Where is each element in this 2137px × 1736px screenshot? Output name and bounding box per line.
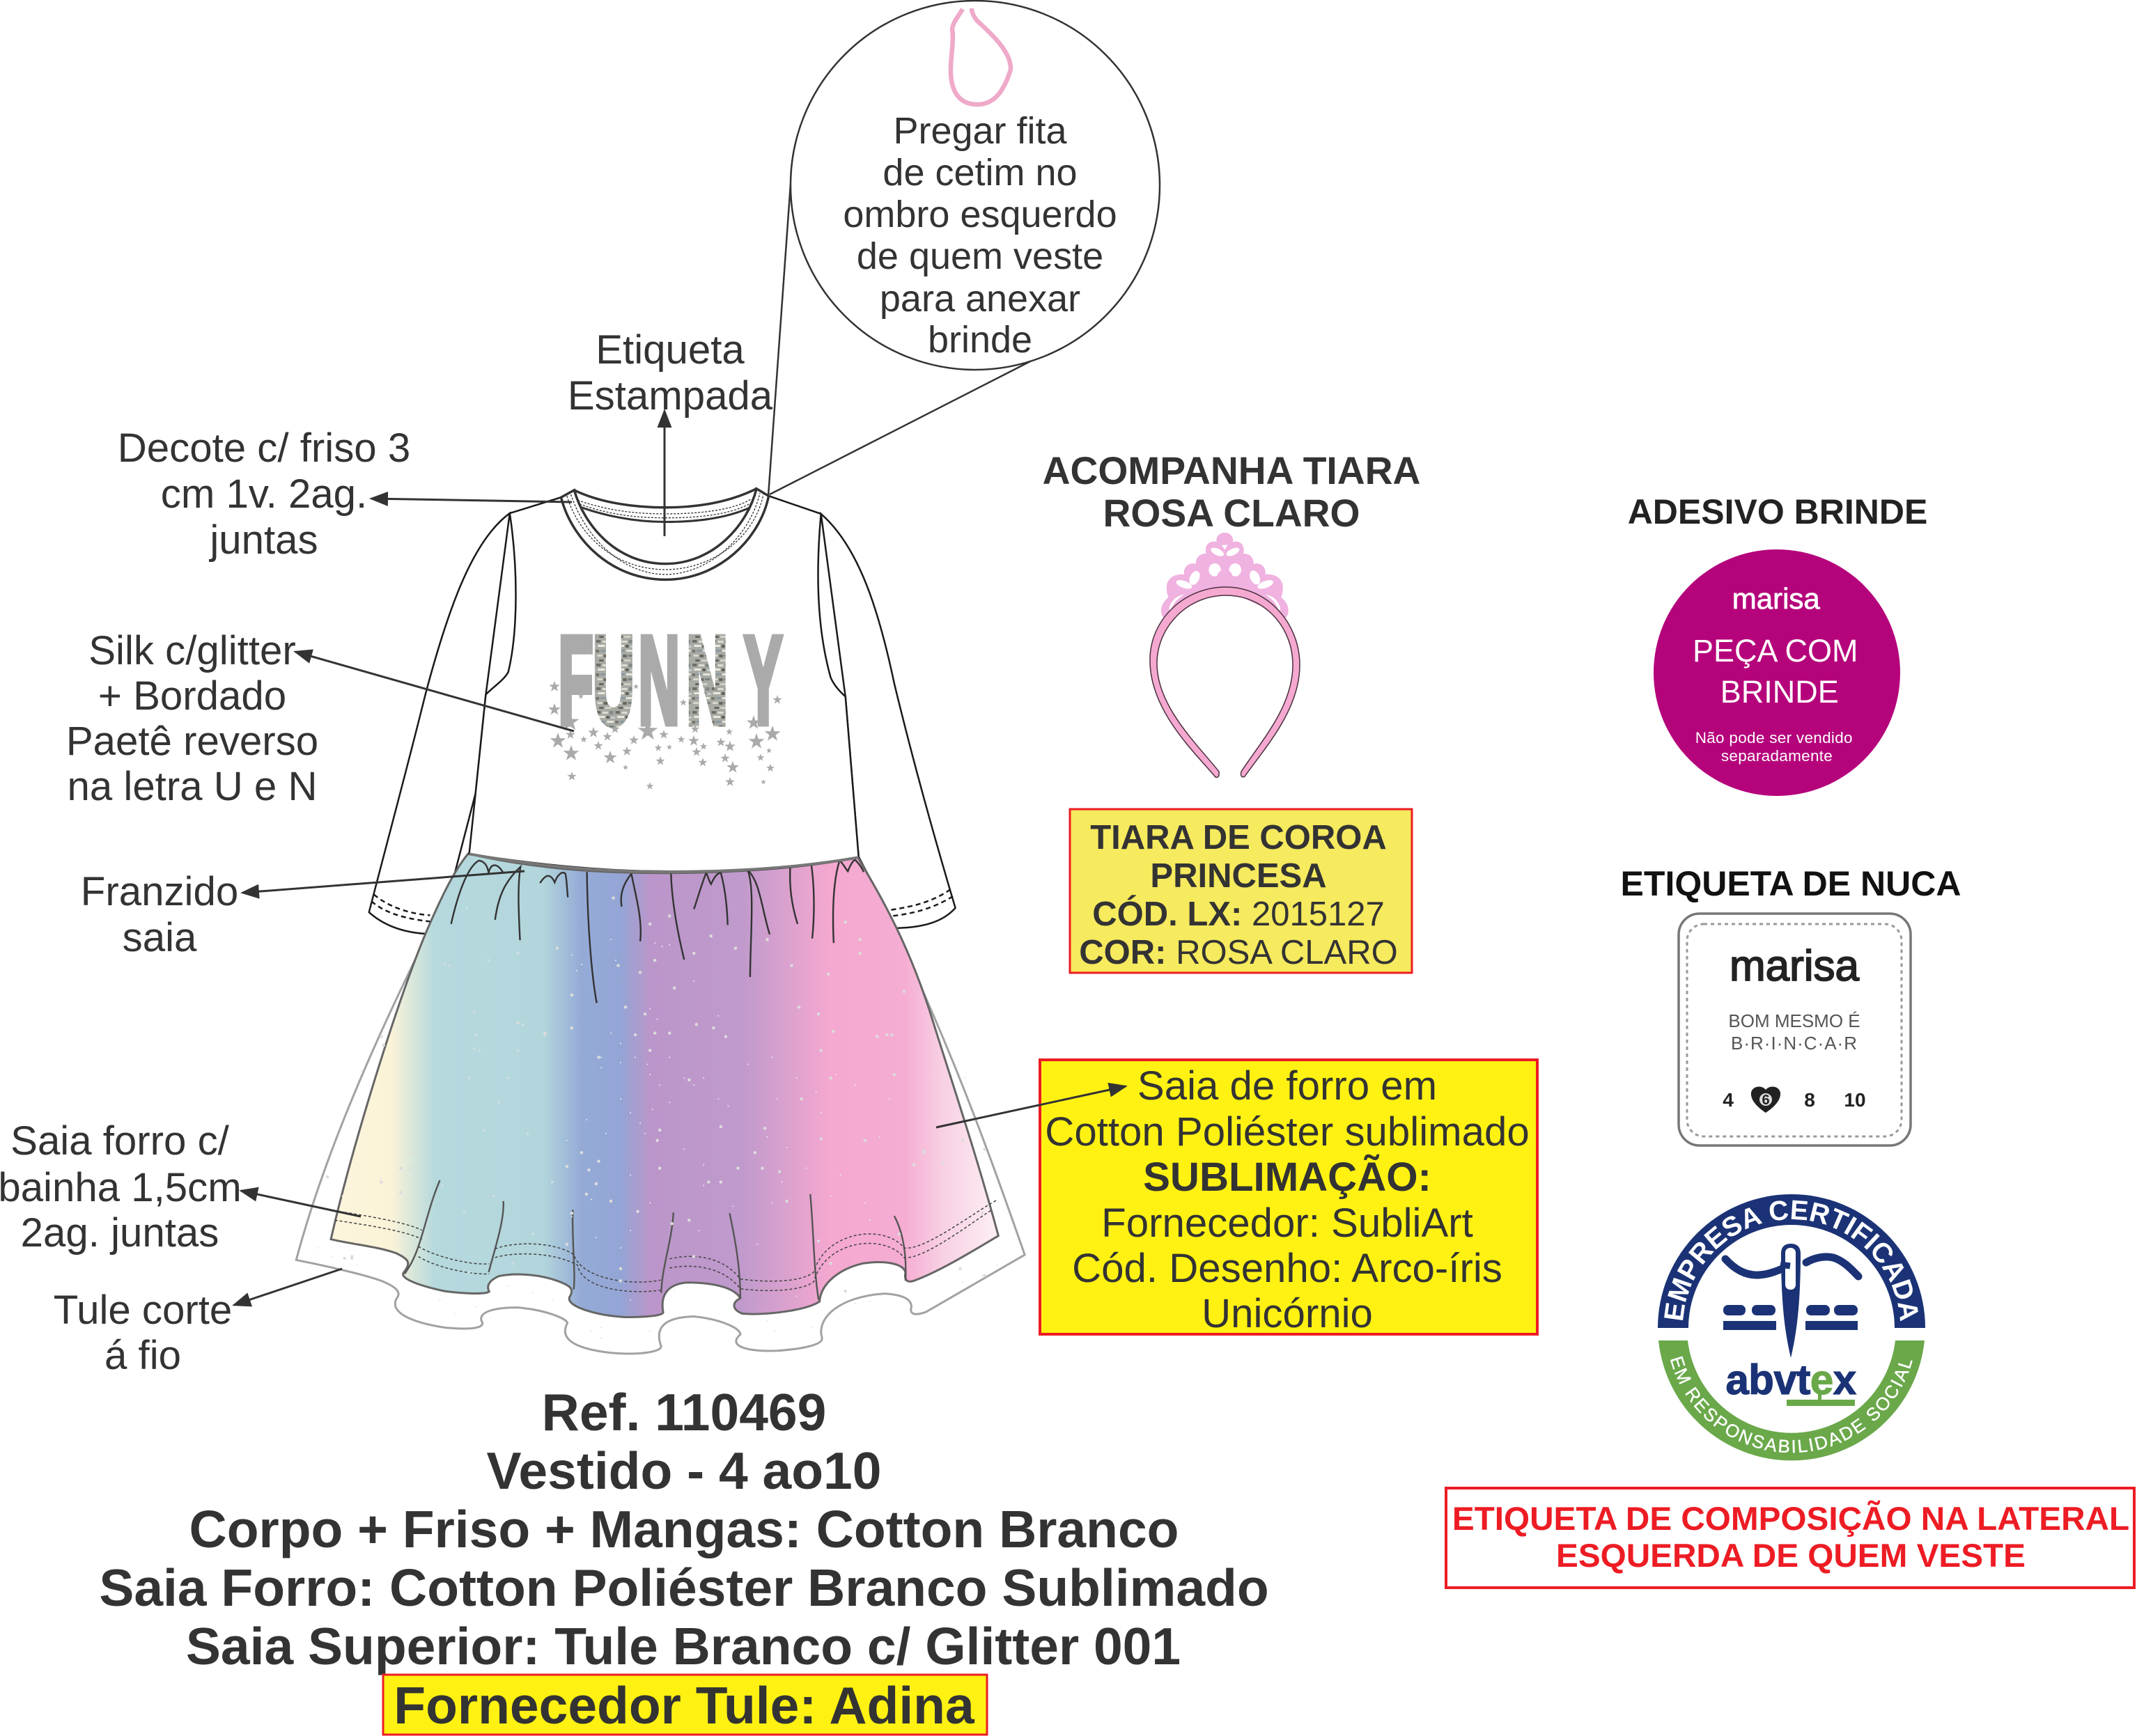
label: Etiqueta Estampada: Estampada [568, 373, 773, 419]
icon: needle and thread [1723, 1244, 1858, 1358]
product specification text: Vestido - 4 ao10 [487, 1441, 881, 1500]
callout: sublimação: Fornecedor: SubliArt [1101, 1201, 1473, 1246]
callout: tiara spec: PRINCESA [1150, 857, 1327, 895]
label: Decote: cm 1v. 2ag. [161, 471, 367, 517]
callout: sublimação: Unicórnio [1202, 1291, 1373, 1336]
product specification text: Saia Superior: Tule Branco c/ Glitter 001 [186, 1617, 1181, 1675]
FUNNY lettering: FUNNY [558, 610, 782, 751]
callout: etiqueta de composição [1446, 1488, 2134, 1588]
glitter on tulle [318, 898, 997, 1338]
label: Silk: Silk c/glitter [88, 628, 296, 673]
abvtex seal [1658, 1194, 1925, 1461]
sticker: peça com brinde [1654, 549, 1900, 796]
cuff stitching [371, 889, 953, 921]
callout: sublimação: Cotton Poliéster sublimado [1045, 1109, 1530, 1155]
arrow: saia forro [241, 1191, 361, 1217]
label: Saia forro: bainha 1,5cm [0, 1165, 242, 1210]
icon: size heart [1751, 1086, 1780, 1113]
label: Etiqueta Estampada: Etiqueta [596, 327, 745, 373]
label: Franzido saia: saia [123, 915, 197, 960]
abvtex wordmark: abvtex [1725, 1356, 1856, 1403]
heading: etiqueta de nuca: ETIQUETA DE NUCA [1621, 864, 1961, 903]
label: Tule: Tule corte [54, 1288, 232, 1333]
label: Saia forro: Saia forro c/ [10, 1118, 230, 1164]
bodice [469, 489, 859, 872]
ribbon note text: de quem veste [857, 235, 1103, 277]
heading: adesivo brinde: ADESIVO BRINDE [1628, 492, 1927, 531]
arrow: saia de forro [936, 1086, 1126, 1127]
callout: tiara spec: COR: ROSA CLARO [1079, 934, 1398, 971]
neck label: 10 [1844, 1089, 1866, 1111]
tulle overlay [296, 854, 1025, 1354]
label: Saia forro: 2ag. juntas [21, 1210, 219, 1256]
label: Silk: na letra U e N [68, 764, 317, 809]
label: Silk: Paetê reverso [66, 719, 318, 764]
product specification text: Corpo + Friso + Mangas: Cotton Branco [189, 1500, 1179, 1558]
garment: dress technical drawing [296, 489, 1025, 1354]
callout: tiara spec: CÓD. LX: 2015127 [1092, 896, 1385, 933]
neck label: marisa [1730, 942, 1860, 990]
arrow: silk [295, 652, 574, 731]
arrow: decote [371, 499, 572, 502]
abvtex seal: EMPRESA CERTIFICADA [1664, 1201, 1918, 1322]
arrow: tule [234, 1269, 342, 1305]
heading: tiara: ACOMPANHA TIARA [1043, 449, 1420, 492]
arrow: franzido [242, 871, 524, 893]
ribbon note text: de cetim no [883, 152, 1078, 194]
sticker: peça com brinde: marisa [1732, 582, 1820, 615]
callout: sublimação: Saia de forro em [1137, 1063, 1437, 1109]
callout: tiara spec: TIARA DE COROA [1090, 819, 1387, 857]
stars [548, 681, 782, 790]
ribbon note text: brinde [928, 319, 1032, 361]
product specification text: Ref. 110469 [542, 1383, 826, 1441]
label: Decote: Decote c/ friso 3 [118, 425, 410, 471]
hem folds [405, 1180, 906, 1300]
sticker: peça com brinde: BRINDE [1720, 674, 1839, 710]
collar [561, 489, 769, 579]
neck label: 4 [1723, 1089, 1734, 1111]
detail circle: ribbon [791, 1, 1160, 370]
ribbon note text: Pregar fita [893, 110, 1068, 152]
rainbow lining [331, 854, 998, 1317]
label: Franzido saia: Franzido [81, 869, 238, 914]
sleeves [369, 513, 956, 934]
callout: sublimação: Cód. Desenho: Arco-íris [1072, 1246, 1502, 1291]
neck label: B·R·I·N·C·A·R [1731, 1033, 1858, 1054]
callout: sublimação: SUBLIMAÇÃO: [1143, 1155, 1431, 1200]
skirt [296, 854, 1025, 1354]
print: FUNNY with stars [548, 610, 782, 790]
callout: tiara spec [1070, 809, 1412, 973]
neck label: 6 [1762, 1093, 1770, 1108]
icon: satin ribbon loop [951, 8, 1011, 104]
arrow: etiqueta [663, 411, 666, 536]
callout: etiqueta de composição: ETIQUETA DE COMPOSIÇÃO NA LATERAL [1452, 1499, 2129, 1538]
connector lines from detail circle [768, 184, 1032, 496]
hem stitching [335, 1200, 997, 1292]
heading: tiara: ROSA CLARO [1103, 492, 1360, 535]
product specification text: Saia Forro: Cotton Poliéster Branco Sublimado [99, 1558, 1269, 1617]
ribbon note text: ombro esquerdo [843, 194, 1117, 235]
neck label: BOM MESMO É [1728, 1010, 1860, 1031]
icon: tiara headband [1150, 533, 1300, 777]
neck label: 8 [1804, 1089, 1815, 1111]
gathers [451, 860, 864, 1003]
callout: etiqueta de composição: ESQUERDA DE QUEM VESTE [1556, 1538, 2026, 1574]
label: Tule: á fio [104, 1333, 181, 1378]
sticker: peça com brinde: Não pode ser vendido [1695, 729, 1853, 746]
waist seam [469, 854, 859, 872]
supplier highlight: Fornecedor Tule: Adina [394, 1676, 975, 1735]
sticker: peça com brinde: PEÇA COM [1693, 633, 1858, 668]
ribbon note text: para anexar [880, 278, 1080, 320]
label: Decote: juntas [208, 517, 318, 563]
sticker: peça com brinde: separadamente [1721, 747, 1833, 765]
callout: sublimação [1040, 1060, 1537, 1336]
abvtex seal: EM RESPONSABILIDADE SOCIAL [1670, 1356, 1913, 1453]
label: Silk: + Bordado [98, 673, 286, 719]
green arc [1658, 1340, 1925, 1460]
blue arc [1658, 1194, 1925, 1328]
neck label [1679, 914, 1911, 1145]
